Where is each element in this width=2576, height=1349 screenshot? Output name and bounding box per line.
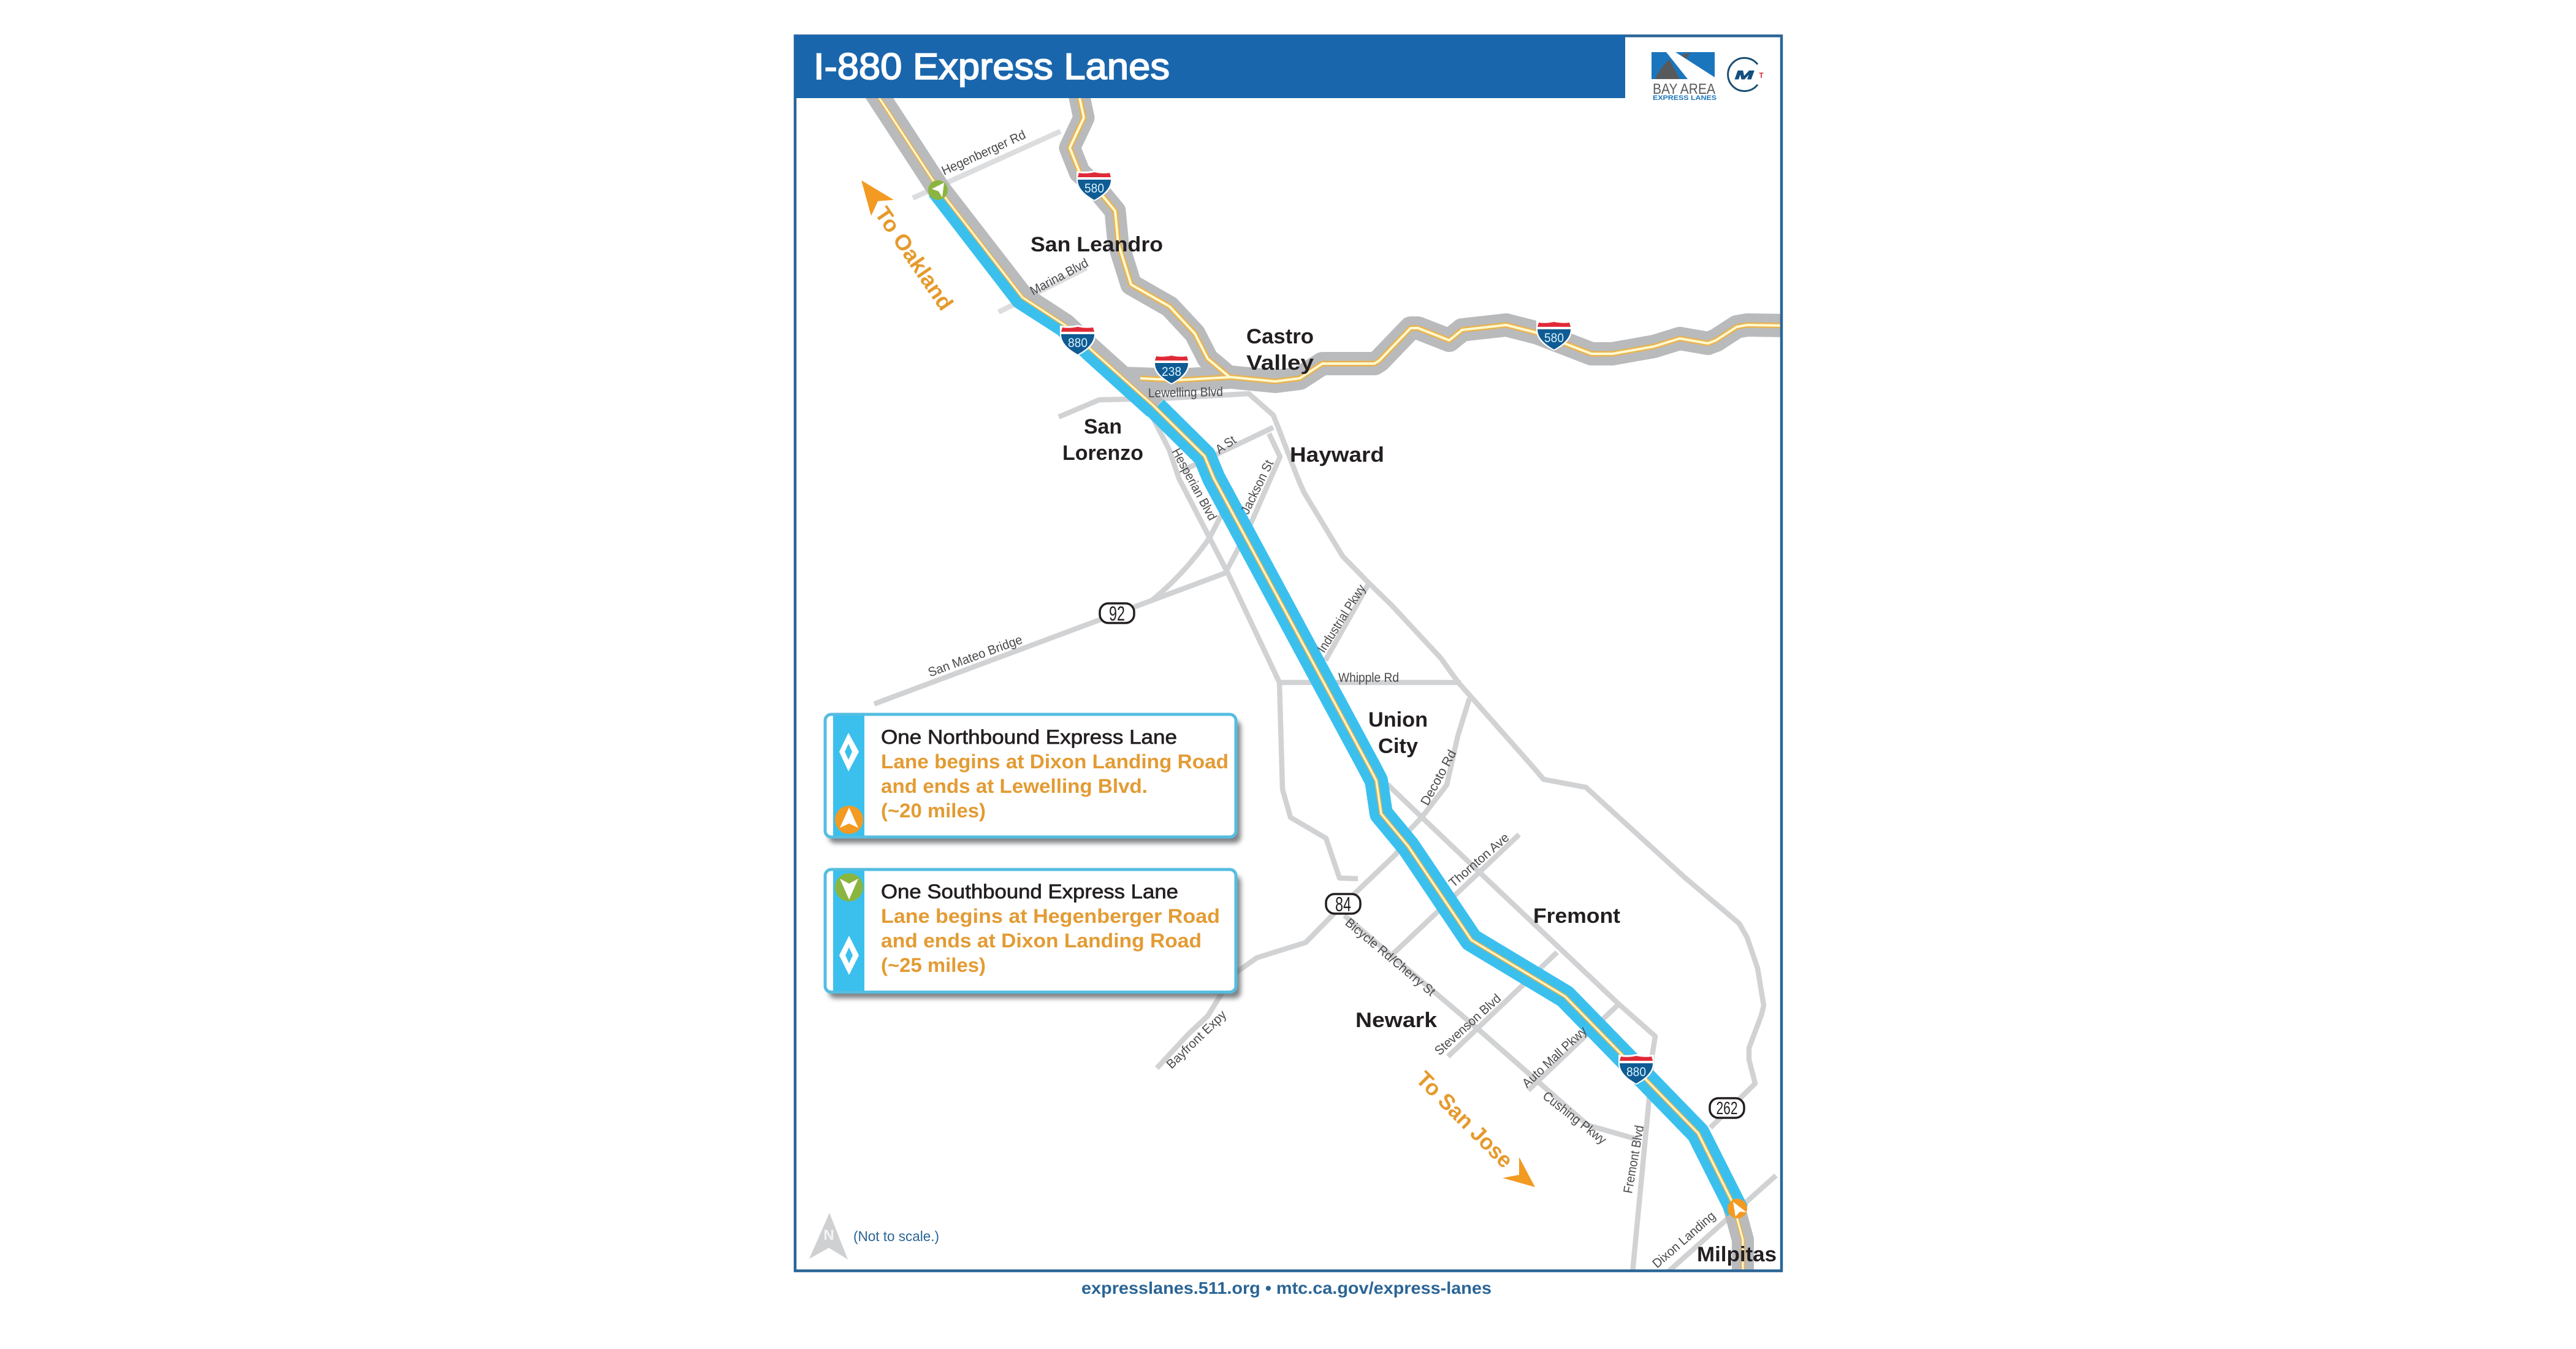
label: Decoto Rd: Decoto Rd [1418,747,1459,808]
label: San Mateo Bridge: San Mateo Bridge [926,633,1024,680]
freeway base: I-880 south of Dixon Landing [1733,1204,1743,1275]
label: Stevenson Blvd: Stevenson Blvd [1432,992,1504,1058]
road: Auto Mall Pkwy [1528,1004,1618,1090]
road: Decoto Rd and SR-84 [1157,698,1469,1068]
label: Bayfront Expy: Bayfront Expy [1164,1007,1229,1072]
legend: northbound [825,714,1241,843]
label: Auto Mall Pkwy: Auto Mall Pkwy [1520,1023,1590,1091]
frame [795,36,1781,1271]
city: Newark: Newark [1355,1009,1437,1032]
icon: express lane diamond [839,936,859,975]
road: Dixon Landing [1667,1175,1776,1272]
label: Industrial Pkwy: Industrial Pkwy [1315,582,1369,655]
legend text: southbound: Lane begins at Hegenberger Road [881,905,1220,927]
label: Cushing Pkwy: Cushing Pkwy [1540,1089,1609,1147]
direction: To Oakland: To Oakland [870,202,958,315]
direction: To San Jose: To San Jose [1411,1066,1518,1173]
legend text: northbound: and ends at Lewelling Blvd. [881,775,1148,797]
logo: Bay Area Express Lanes: EXPRESS LANES [1653,94,1717,102]
road: A St [1183,427,1273,470]
express lane: both directions [1156,408,1737,1211]
freeway base: I-580 [1070,92,1230,378]
road: Thornton Ave [1393,835,1519,953]
north arrow [809,1213,848,1259]
icon: express lane diamond [839,733,859,771]
road: SR-92 San Mateo Bridge [874,573,1226,704]
street labels [926,128,1718,1271]
city: Union City: Union [1368,708,1428,732]
icon: orange lane marker [835,806,863,834]
icon: green lane marker [835,873,863,901]
city: Castro Valley [1246,325,1314,375]
shield: SR-84 [1326,893,1360,915]
legend: southbound [825,869,1241,998]
city: Fremont: Fremont [1533,904,1620,928]
shield: I-880 south: 880 [1626,1065,1646,1079]
legend text: southbound: (~25 miles) [881,954,986,976]
shield: SR-92 [1100,602,1134,625]
legend text: southbound [881,881,1220,976]
arrow: toward San Jose [1503,1157,1535,1187]
city: San Lorenzo: San [1084,415,1122,438]
freeway base: I-238 and I-580 east [1122,325,1784,381]
legend text: southbound: and ends at Dixon Landing Road [881,930,1202,952]
note: not to scale: (Not to scale.) [853,1228,939,1244]
label: Bicycle Rd / Cherry St: Bicycle Rd/Cherry St [1343,915,1438,999]
city: Castro Valley: Valley [1246,351,1314,375]
legend text: northbound: Lane begins at Dixon Landing Road [881,751,1229,773]
city: Union City [1368,708,1428,758]
shield: SR-92: 92 [1109,602,1125,625]
centerline: I-880 pale core [875,92,1743,1275]
centerline: I-580 pale core [1070,92,1784,381]
legend text: northbound: (~20 miles) [881,800,986,822]
road: Fremont Blvd [1387,784,1655,1272]
marker: southbound lane start [928,180,948,200]
logo: MTC [1728,58,1764,91]
city: Hayward: Hayward [1290,443,1384,467]
map [809,92,1784,1275]
shield: SR-262: 262 [1717,1099,1737,1118]
label: Marina Blvd: Marina Blvd [1028,256,1091,298]
label: Hesperian Blvd: Hesperian Blvd [1169,446,1219,523]
label: Fremont Blvd: Fremont Blvd [1621,1125,1647,1194]
city: Castro Valley: Castro [1246,325,1314,348]
local roads [874,131,1776,1272]
label: Thornton Ave: Thornton Ave [1446,830,1512,890]
label: Hegenberger Rd: Hegenberger Rd [940,128,1028,178]
shield: I-580 east [1536,320,1572,351]
road: Marina Blvd [999,268,1086,312]
road: Stevenson Blvd [1448,952,1557,1057]
logo: Bay Area Express Lanes: BAY AREA [1653,81,1715,97]
road: Jackson St [1226,434,1280,571]
road: Industrial Pkwy [1325,584,1368,660]
shield: I-880 north [1060,325,1096,356]
freeway centerlines [875,92,1784,1275]
label: Lewelling Blvd: Lewelling Blvd [1148,385,1223,400]
city: Milpitas: Milpitas [1697,1243,1777,1266]
legend text: northbound: One Northbound Express Lane [881,726,1177,748]
shield: SR-84: 84 [1335,893,1351,915]
label: Jackson St: Jackson St [1238,458,1276,516]
arrow: toward Oakland [861,180,894,216]
road: Hesperian Blvd [1153,417,1358,879]
legend text: northbound [881,726,1229,822]
city: San Leandro: San Leandro [1031,233,1163,256]
centerline: I-880 gold casing [875,92,1743,1275]
city: San Lorenzo [1062,415,1143,465]
label: A St: A St [1213,433,1239,457]
city: Union City: City [1378,735,1418,758]
logo: MTC: T [1759,71,1764,80]
north arrow: N [823,1227,834,1244]
shield: I-880 south [1618,1054,1654,1085]
title banner [795,35,1625,98]
express lane: southbound only section [934,193,1151,412]
footer links: expresslanes.511.org • mtc.ca.gov/express-lanes [1081,1278,1492,1297]
shield: I-580 north: 580 [1084,182,1104,196]
label: Dixon Landing: Dixon Landing [1650,1209,1718,1271]
road: Whipple Rd [1279,680,1461,685]
label: Whipple Rd: Whipple Rd [1338,671,1399,685]
shield: I-238: 238 [1162,365,1181,379]
title: I-880 Express Lanes [814,46,1170,87]
road: Lewelling Blvd and Mission corridor [1059,394,1764,1128]
road: connector to SR-92 [1151,506,1226,601]
logo: Bay Area Express Lanes [1652,52,1717,102]
city labels [1031,233,1777,1266]
shield: I-238 [1154,354,1189,384]
shield: I-580 north [1077,170,1112,201]
city: San Lorenzo: Lorenzo [1062,441,1143,465]
road: Bicycle Rd / Cushing Pkwy [1344,915,1637,1139]
shield: I-580 east: 580 [1544,331,1564,345]
freeway base: I-880 north [875,92,1156,408]
shield: I-880 north: 880 [1068,336,1088,350]
logo: MTC: M [1735,69,1755,82]
legend text: southbound: One Southbound Express Lane [881,881,1178,903]
road: Hegenberger Rd [913,131,1061,198]
centerline: I-580 gold casing [1070,92,1784,381]
marker: northbound lane start [1728,1199,1747,1218]
